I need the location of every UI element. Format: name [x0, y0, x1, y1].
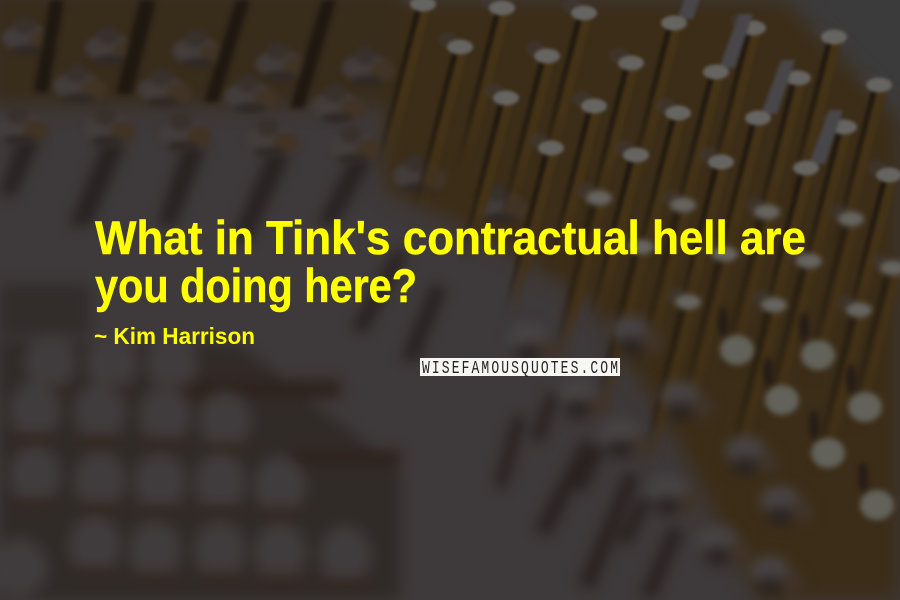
- lower-left blurred rows of discs: [0, 285, 400, 600]
- quote text: What in Tink's contractual hell are: [95, 211, 806, 264]
- right pins: rows of brass shafts with pale heads: [374, 0, 900, 340]
- quote text: you doing here?: [95, 259, 417, 312]
- quote text: [95, 211, 806, 312]
- attribution: ~ Kim Harrison: [94, 323, 255, 349]
- left pins, top row: [2, 16, 396, 85]
- lower left shadows under bulbs: [0, 135, 446, 362]
- watermark badge: WISEFAMOUSQUOTES.COM: [422, 358, 618, 379]
- dark stems: [34, 0, 336, 108]
- central dark blurred streaks and bulbs: [494, 316, 814, 598]
- bright lower-right pin heads: [718, 307, 894, 520]
